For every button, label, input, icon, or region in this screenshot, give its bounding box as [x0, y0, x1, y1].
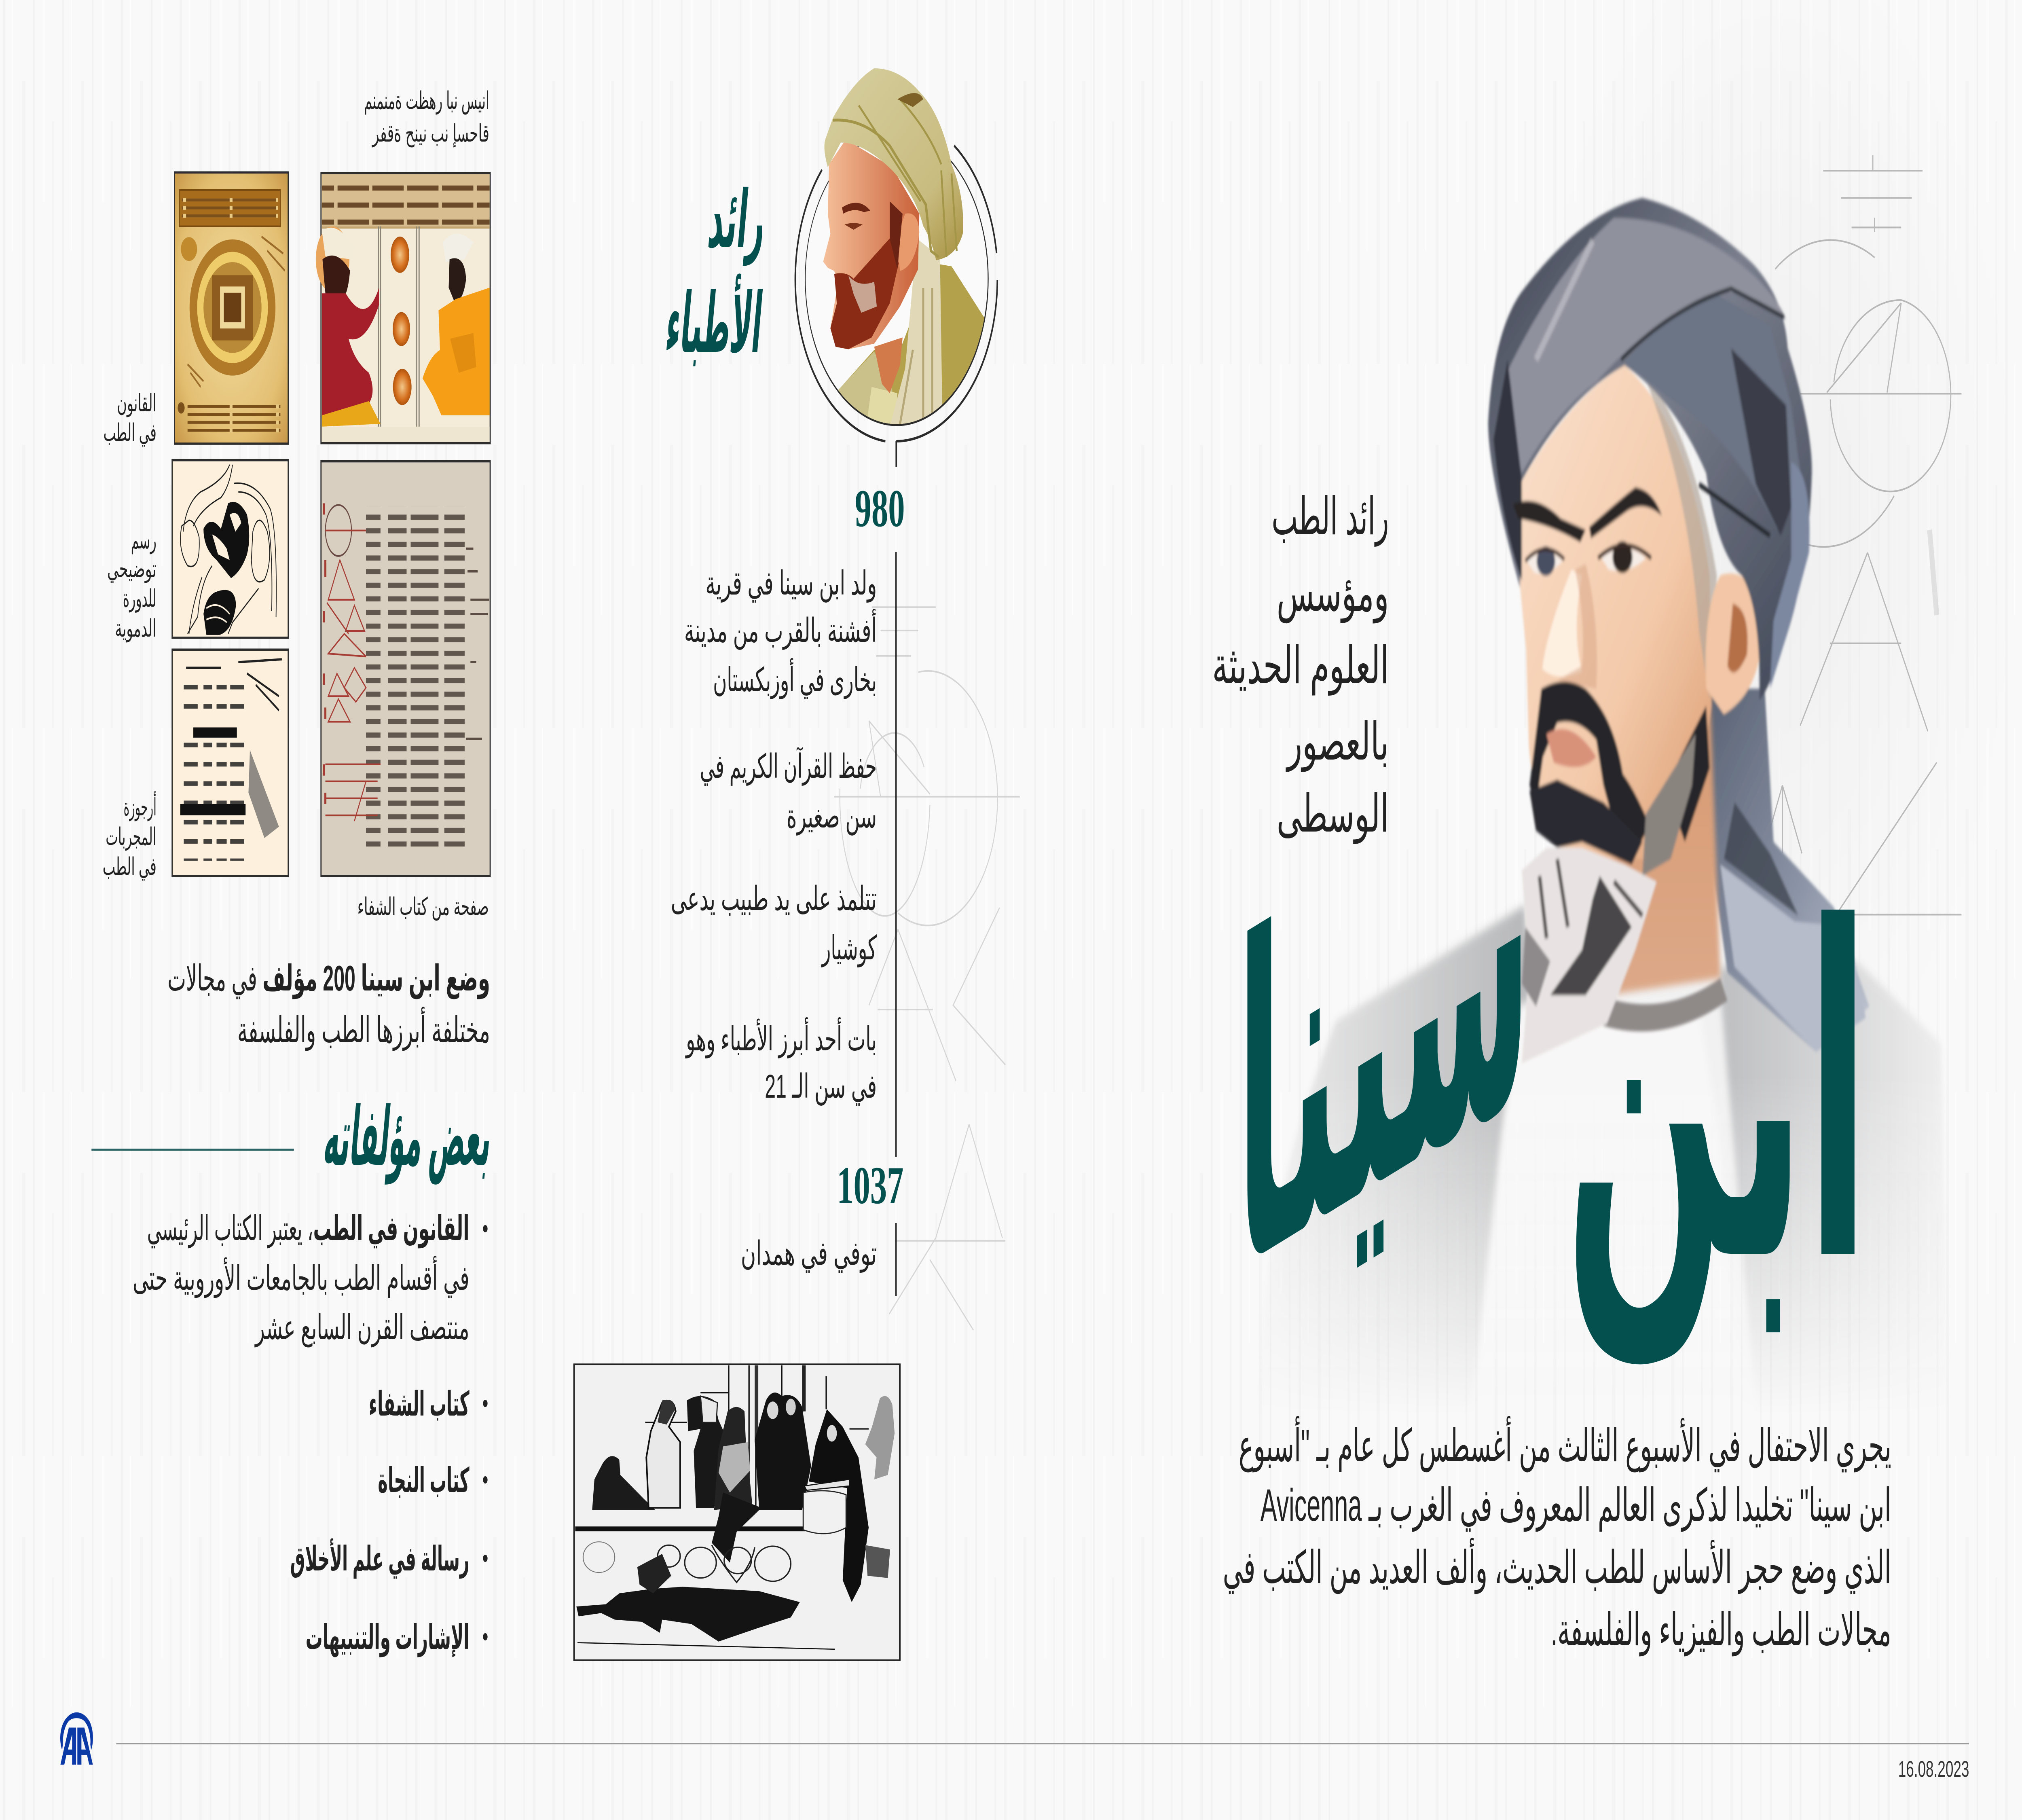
date: 16.08.2023	[1898, 1757, 1969, 1782]
image captions	[103, 389, 489, 921]
main title: Ibn Sina: ابن	[1565, 844, 1870, 1367]
label: Shifa: صفحة من كتاب الشفاء	[357, 893, 489, 921]
item: Book of Salvation: كتاب النجاة	[378, 1461, 470, 1499]
image: miniature painting	[316, 173, 490, 443]
timeline	[671, 478, 905, 1296]
red seated figure	[316, 226, 349, 292]
manuscript heading band	[322, 174, 490, 226]
heading: pioneer of physicians	[662, 175, 775, 370]
timeline entry: physician at 21: بات أحد أبرز الأطباء وهو	[685, 1017, 877, 1058]
subtitle block: الوسطى	[1277, 785, 1389, 844]
ear	[1706, 574, 1762, 714]
image: circulation diagram	[172, 460, 288, 638]
statement: 200 works	[167, 959, 490, 1051]
label: circulation: الدموية	[115, 615, 157, 642]
right figure	[865, 1396, 895, 1479]
label: circulation	[107, 527, 157, 642]
faint geometry sketch behind portrait	[1766, 155, 1961, 914]
margin scribble	[248, 750, 279, 838]
timeline entry: death: توفي في همدان	[741, 1235, 877, 1273]
hanging scarf	[1706, 689, 1869, 1052]
label: circulation: رسم	[131, 527, 157, 554]
orange seated figure	[443, 234, 473, 262]
statement: 200 works: وضع ابن سينا 200 مؤلف في مجالات	[167, 959, 490, 1000]
year 1037: 1037	[837, 1155, 903, 1215]
timeline entry: Quran: حفظ القرآن الكريم في	[700, 746, 877, 786]
image: page of Kitab al-Shifa	[321, 461, 490, 876]
robe and shoulders	[1280, 903, 1941, 1362]
scribe figure	[809, 1409, 869, 1602]
label: Canon	[104, 389, 157, 447]
margin notes	[466, 549, 489, 739]
label: Canon: في الطب	[104, 419, 157, 447]
intro paragraph: ابن سينا" تخليدا لذكرى العالم المعروف في الغرب بـ Avicenna	[1261, 1479, 1891, 1532]
portrait beard	[830, 239, 899, 349]
white lower beard	[1522, 848, 1656, 1063]
central medallion	[190, 239, 275, 376]
label: circulation: للدورة	[123, 585, 157, 613]
timeline entry: student	[671, 880, 877, 967]
standing figures	[646, 1401, 680, 1508]
portrait ear	[896, 213, 919, 271]
caption: miniature: منمنمة تظهر ابن سينا	[364, 87, 489, 114]
intro paragraph: الذي وضع حجر الأساس للطب الحديث، وألف العديد من الكتب في	[1223, 1537, 1891, 1594]
medallion rings	[795, 133, 997, 467]
eyes	[1527, 552, 1563, 574]
item: Canon of Medicine: القانون في الطب، يعتبر الكتاب الرئيسي	[147, 1209, 470, 1249]
manuscript text	[366, 506, 465, 847]
item: Remarks and Admonitions: الإشارات والتنبيهات	[306, 1618, 470, 1658]
label: circulation: توضيحي	[107, 555, 157, 583]
timeline entry: Quran	[700, 746, 877, 836]
subtitle block: ومؤسس	[1277, 564, 1389, 623]
heading: pioneer of physicians: الأطباء	[662, 273, 767, 370]
timeline entry: birth: ولد ابن سينا في قرية	[705, 565, 877, 603]
caption: miniature	[364, 87, 489, 148]
list of works	[133, 1209, 488, 1658]
architecture lines	[645, 1365, 869, 1508]
vessels	[180, 465, 276, 634]
main title: Ibn Sina: سينا	[1236, 693, 1532, 1362]
caption: miniature: رفقة حنين بن إسحاق	[372, 120, 489, 148]
scrolled relief	[583, 1542, 791, 1582]
image: black and white scene	[574, 1364, 900, 1660]
intro paragraph: مجالات الطب والفيزياء والفلسفة.	[1550, 1604, 1891, 1657]
foliage	[576, 1587, 800, 1642]
timeline axis	[895, 552, 897, 1296]
timeline entry: student: تتلمذ على يد طبيب يدعى	[671, 880, 877, 917]
item: Canon of Medicine: منتصف القرن السابع عشر	[254, 1308, 470, 1347]
small profile portrait medallion	[795, 68, 997, 467]
image: Urjuza manuscript	[172, 650, 288, 876]
heading: some of his works: بعض مؤلفاته	[321, 1092, 495, 1185]
ornamental band	[180, 190, 280, 226]
heading: pioneer of physicians: رائد	[705, 175, 770, 266]
footer rule	[116, 1743, 1969, 1744]
rosettes	[391, 237, 409, 273]
label: Canon: القانون	[117, 389, 157, 417]
item: Book of Healing: كتاب الشفاء	[369, 1385, 470, 1423]
heading: some of his works	[91, 1092, 495, 1185]
timeline entry: student: كوشيار	[821, 930, 877, 967]
faint geometry sketch behind timeline	[834, 607, 1020, 1330]
label: Urjuza: في الطب	[103, 853, 157, 880]
item: Treatise on Ethics: رسالة في علم الأخلاق	[290, 1539, 470, 1579]
subtitle block: بالعصور	[1286, 713, 1389, 772]
columns	[379, 226, 419, 427]
neck	[1586, 689, 1720, 995]
small medallion	[181, 237, 197, 261]
manuscript text columns	[182, 685, 212, 719]
turban	[1488, 198, 1812, 700]
timeline entry: physician at 21: في سن الـ 21	[765, 1068, 877, 1106]
left seated group	[592, 1456, 656, 1510]
heart	[203, 502, 249, 578]
portrait turban	[824, 68, 963, 260]
ledge	[575, 1526, 806, 1531]
main portrait of Ibn Sina	[1258, 198, 1946, 1416]
label: Urjuza: المجربات	[106, 823, 157, 851]
timeline entry: Quran: سن صغيرة	[787, 798, 877, 836]
nose shadow	[1557, 564, 1597, 689]
liver	[203, 590, 236, 635]
portrait eyebrow and eye	[842, 203, 870, 214]
item: Canon of Medicine: في أقسام الطب بالجامعات الأوروبية حتى	[133, 1256, 470, 1299]
timeline entry: birth	[684, 565, 877, 699]
timeline entry: birth: أفشنة بالقرب من مدينة	[684, 608, 877, 650]
subtitle block	[1212, 487, 1389, 844]
subtitle block: العلوم الحديثة	[1212, 636, 1389, 696]
portrait garment	[806, 146, 988, 424]
timeline entry: physician at 21	[685, 1017, 877, 1106]
label: Urjuza	[103, 791, 157, 880]
label: Urjuza: أرجوزة	[124, 791, 157, 821]
face	[1520, 365, 1711, 859]
item: Canon of Medicine	[133, 1209, 488, 1347]
portrait face	[823, 140, 919, 349]
eyebrows	[1513, 501, 1586, 542]
timeline entry: birth: بخارى في أوزبكستان	[713, 658, 877, 699]
intro paragraph: يجري الاحتفال في الأسبوع الثالث من أغسطس كل عام بـ "أسبوع	[1239, 1416, 1891, 1473]
image: Canon of Medicine	[174, 172, 288, 444]
moustache and dark beard	[1529, 681, 1650, 853]
central draped cloth	[712, 1492, 761, 1563]
logo: Anadolu Agency	[60, 1712, 93, 1765]
manuscript bold titles	[193, 728, 237, 738]
colophon lines	[188, 401, 280, 433]
subtitle block: رائد الطب	[1271, 487, 1389, 547]
intro paragraph	[1223, 1416, 1891, 1657]
statement: 200 works: مختلفة أبرزها الطب والفلسفة	[237, 1007, 490, 1051]
red geometry diagrams	[324, 503, 381, 821]
collar	[1582, 978, 1728, 1031]
year 980: 980	[855, 478, 905, 538]
